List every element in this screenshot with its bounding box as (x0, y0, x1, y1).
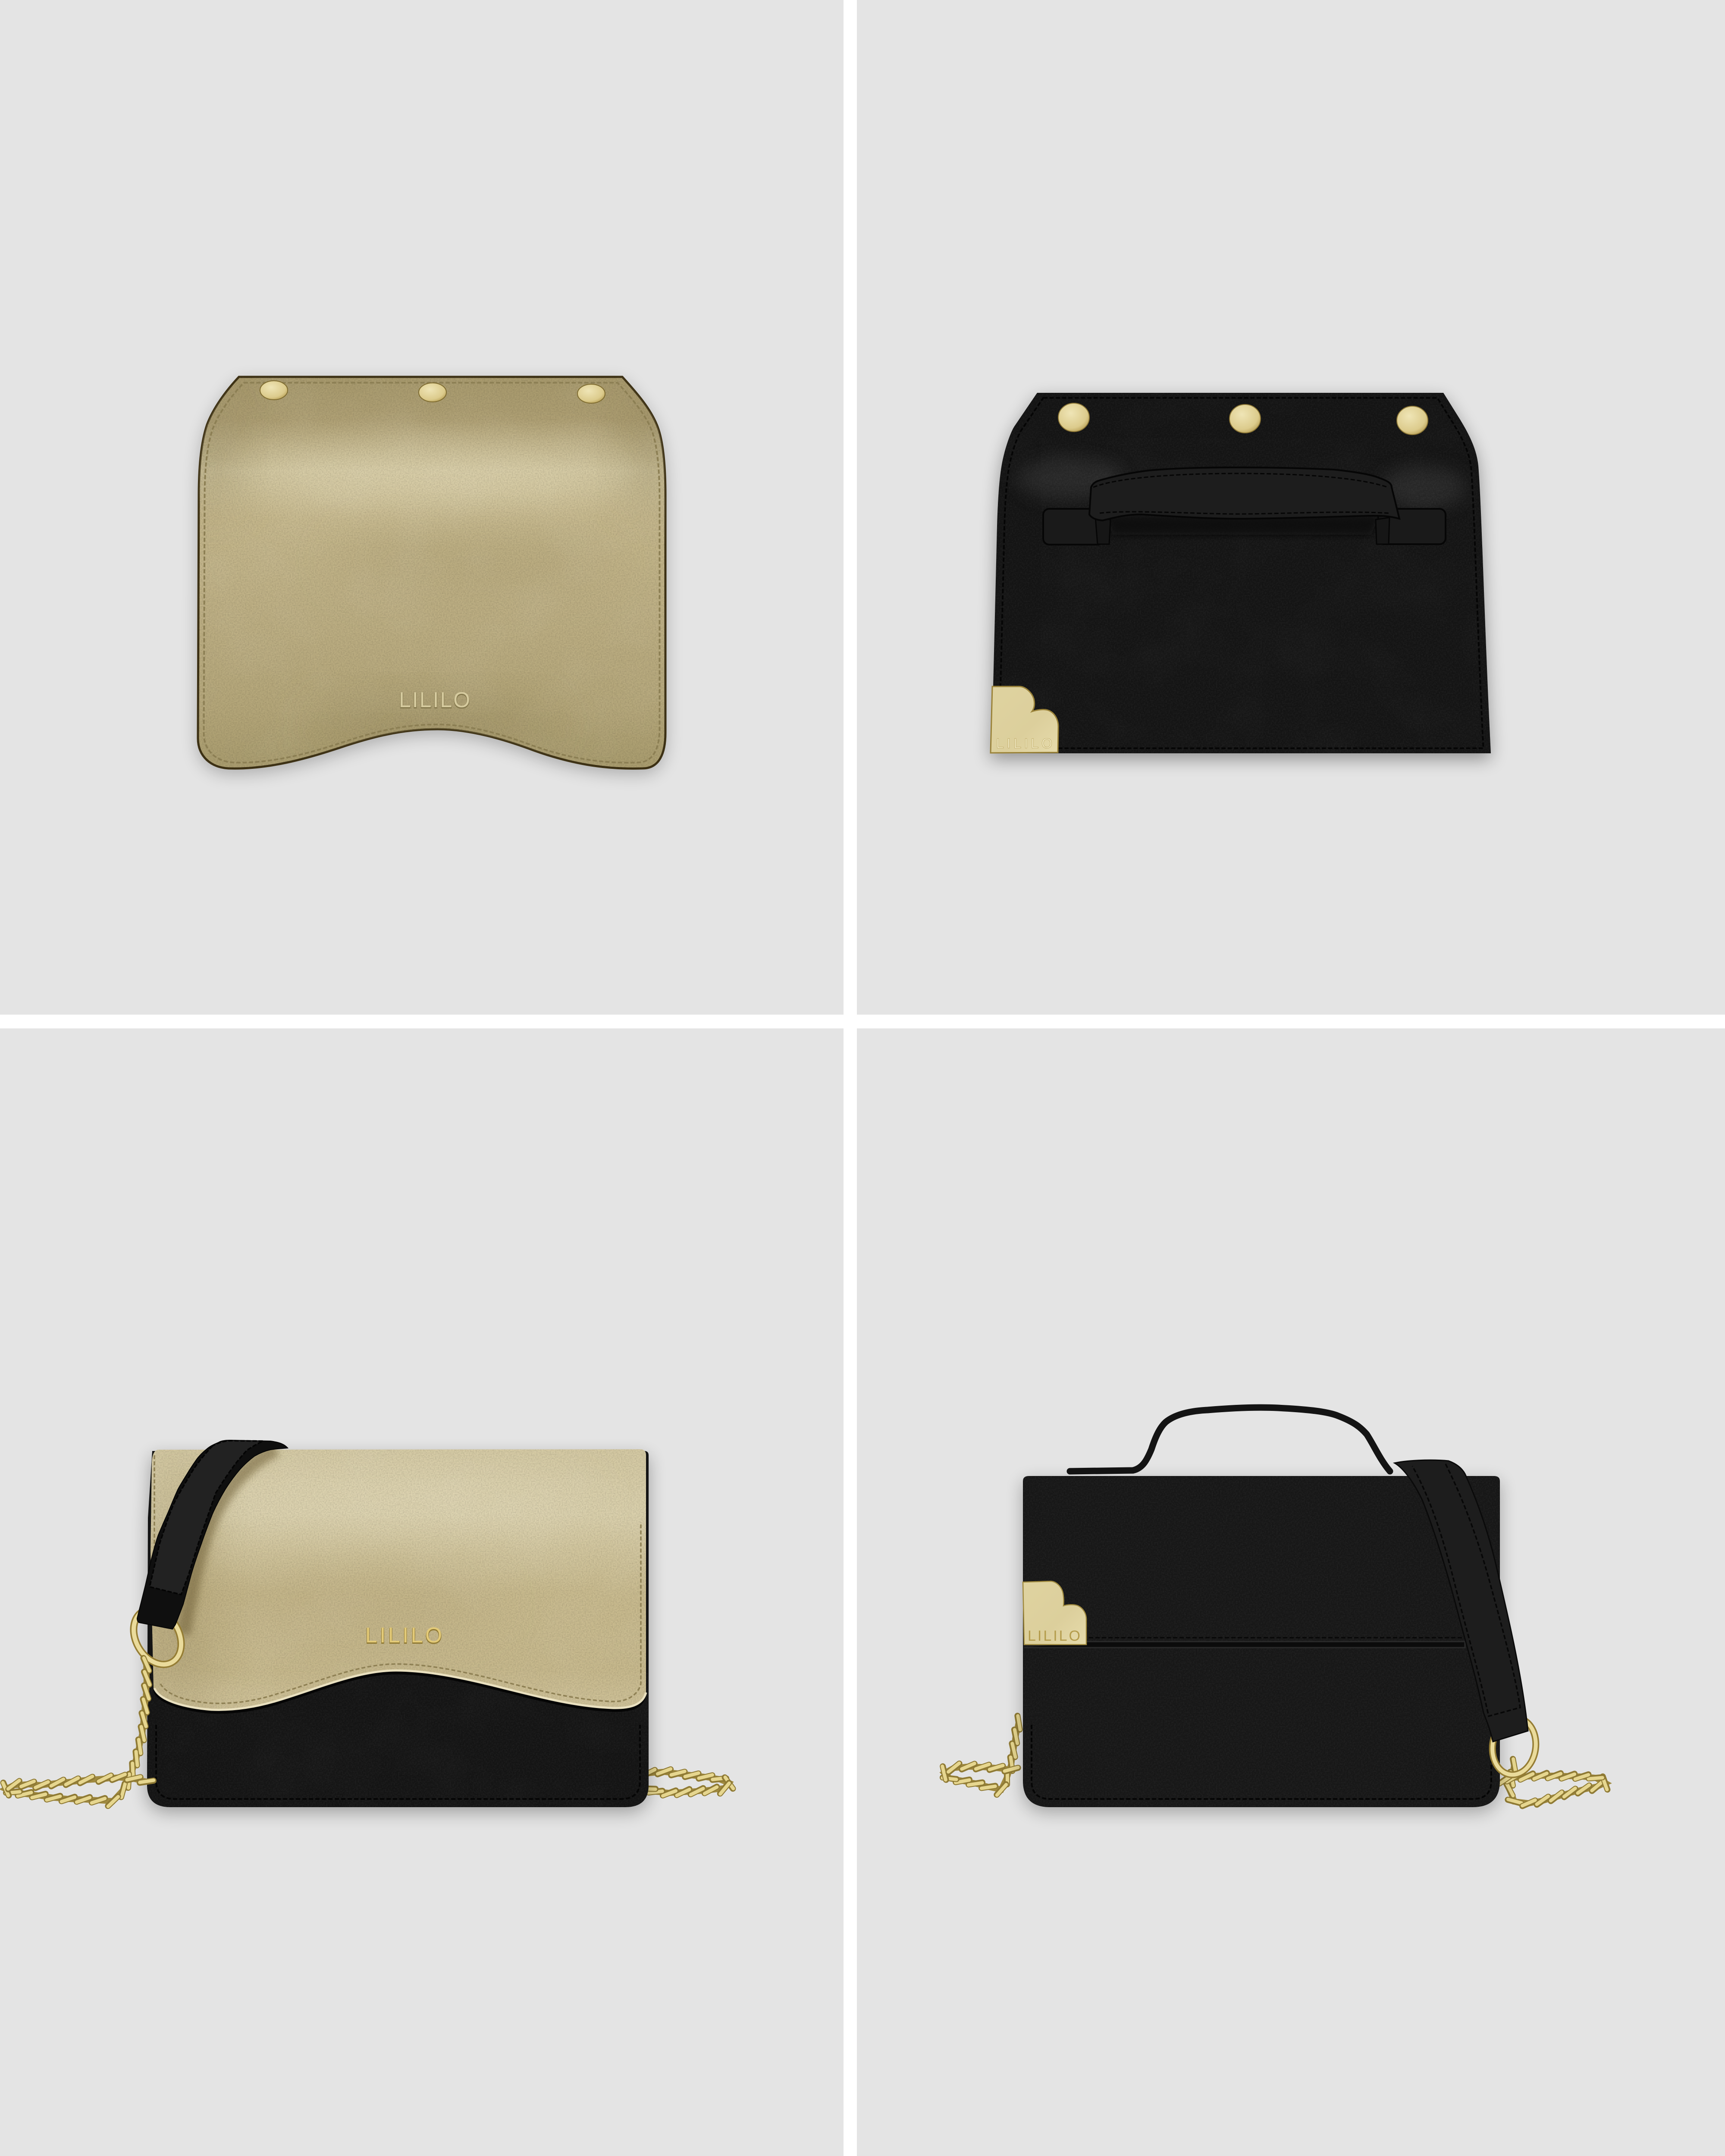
plate logo: LILILO (1028, 1628, 1080, 1644)
panel: gold flap accessory (0, 0, 844, 1015)
embossed logo: LILILO (365, 1623, 442, 1647)
snap button middle (1229, 404, 1261, 433)
left tab (1043, 509, 1104, 545)
embossed logo: LILILO (365, 1624, 442, 1648)
panel: black top handle bag (857, 1028, 1725, 2156)
panel background top left (0, 0, 844, 1015)
body stitching (156, 1725, 640, 1799)
handle assembly (1043, 467, 1446, 545)
embossed logo: LILILO (399, 689, 470, 713)
top handle (1070, 1407, 1390, 1471)
snap button right (577, 384, 605, 403)
panel background bottom right (857, 1028, 1725, 2156)
gold flap (151, 1453, 646, 1714)
chain left (6, 1664, 147, 1801)
chain left (944, 1723, 1019, 1789)
right loop end (1376, 517, 1389, 544)
flap stitching (204, 383, 659, 763)
right tab (1378, 509, 1446, 544)
snap button left (260, 381, 288, 400)
snap button middle (419, 383, 446, 402)
metal corner plate (1023, 1581, 1086, 1645)
panel background bottom left (0, 1028, 844, 2156)
plate logo: LILILO (996, 736, 1052, 751)
chain behind bag right (649, 1772, 729, 1793)
crossbody bag (147, 1447, 651, 1812)
black flap (988, 388, 1496, 759)
body stitching (1032, 1725, 1491, 1799)
black body (147, 1451, 649, 1807)
handle stitching (1093, 473, 1389, 514)
handle strap (1089, 467, 1399, 520)
left loop end (1095, 517, 1110, 544)
embossed logo: LILILO (399, 688, 470, 712)
snap button right (1397, 406, 1428, 435)
black bag (1022, 1475, 1501, 1812)
strap shadow on flap (183, 1449, 276, 1634)
flap wave edge (154, 1670, 646, 1710)
chain right (1505, 1766, 1605, 1803)
shoulder strap (1395, 1460, 1528, 1742)
snap button left (1058, 403, 1089, 432)
D ring (124, 1601, 191, 1673)
strap inner panel with stitching (150, 1441, 263, 1595)
strap stitching (1412, 1464, 1520, 1716)
seam stitching (1089, 1637, 1464, 1639)
flap stitching (997, 398, 1484, 748)
gold flap (185, 371, 679, 774)
metal corner plate (991, 686, 1058, 753)
shoulder strap (137, 1440, 288, 1629)
panel: gold and black crossbody bag (0, 1028, 844, 2156)
handle underside shadow (1104, 515, 1380, 535)
panel background top right (857, 0, 1725, 1015)
D ring (1489, 1715, 1540, 1777)
panel: black flap accessory (857, 0, 1725, 1015)
flap stitching (154, 1455, 641, 1703)
flap seam (1024, 1642, 1465, 1648)
